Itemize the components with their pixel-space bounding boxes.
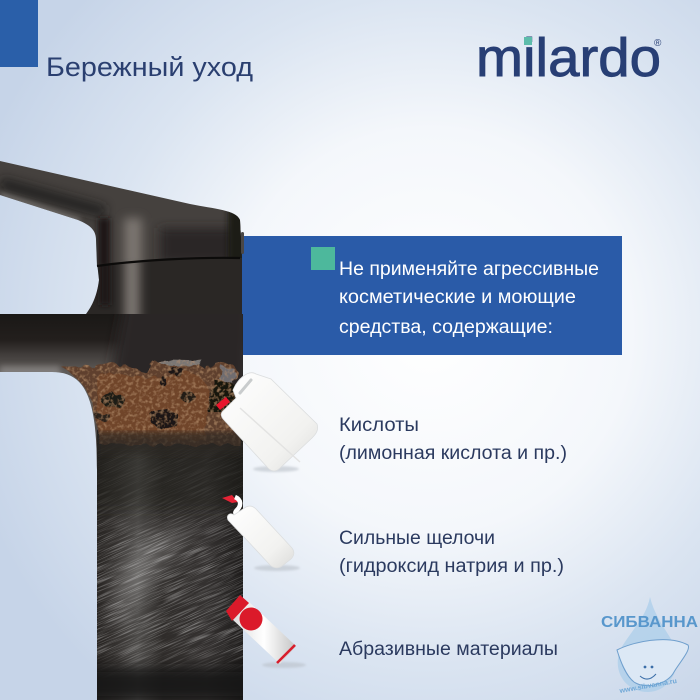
title: Бережный уход (46, 52, 253, 82)
logo: milardo: milardo (476, 28, 661, 88)
neck (86, 258, 242, 314)
wordmark: СИБВАННА (601, 614, 698, 631)
lower body (97, 430, 243, 700)
rust patch (60, 360, 242, 445)
label: alkalis: Сильные щелочи (339, 528, 495, 549)
info panel (240, 236, 622, 355)
label: abrasives: Абразивные материалы (339, 639, 558, 660)
icon: canister (216, 373, 318, 472)
label: acids: Кислоты (339, 415, 419, 436)
panel text (339, 259, 599, 338)
spout and upper body (0, 314, 243, 470)
label: alkalis (339, 528, 564, 577)
collar seam (97, 258, 240, 266)
panel text: косметические и моющие (339, 287, 576, 308)
url: www.sibvanna.ru (618, 678, 677, 695)
green marker (311, 247, 335, 270)
drop (618, 597, 677, 692)
scratches (97, 442, 243, 700)
label: alkalis: (гидроксид натрия и пр.) (339, 556, 564, 577)
logo: milardo: ® (654, 38, 662, 49)
faucet (0, 150, 255, 700)
handle lever (0, 161, 242, 266)
label: acids (339, 415, 567, 464)
watermark: Sibvanna (601, 597, 698, 695)
label: acids: (лимонная кислота и пр.) (339, 443, 567, 464)
panel text: средства, содержащие: (339, 317, 553, 338)
panel text: Не применяйте агрессивные (339, 259, 599, 280)
bathtub (617, 640, 689, 686)
icon: tube (226, 595, 306, 668)
corner accent (0, 0, 38, 67)
icon: bleach bottle (222, 495, 300, 571)
